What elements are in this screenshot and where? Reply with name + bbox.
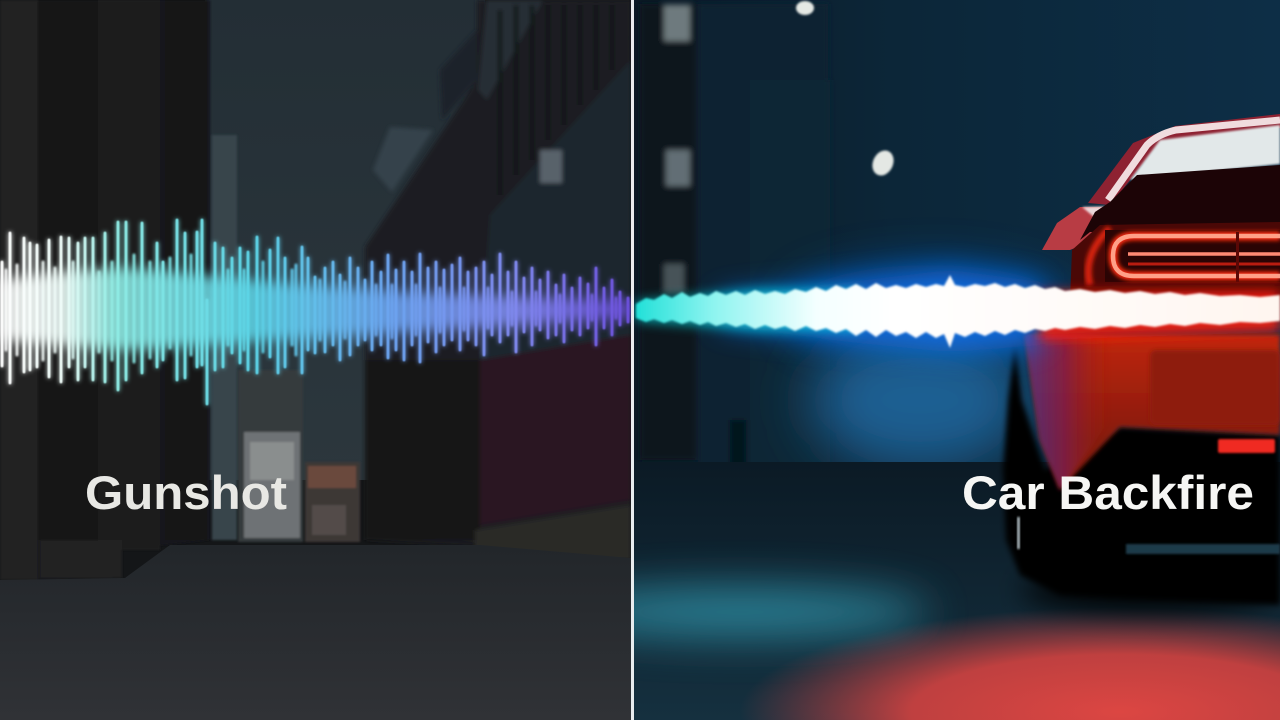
waveform: car backfire <box>636 270 1280 352</box>
label: Gunshot: Gunshot <box>85 466 287 519</box>
wave core <box>636 275 1280 348</box>
wave cyan glow <box>636 290 860 330</box>
waveform short spikes <box>6 255 616 362</box>
waveform spikes <box>2 220 628 404</box>
dark deck <box>1080 165 1280 240</box>
road <box>634 462 1280 720</box>
tail lamp <box>1113 236 1280 276</box>
left buildings <box>0 0 237 580</box>
wave blue glow <box>720 270 1040 352</box>
car tyre and bumper <box>1003 345 1280 605</box>
waveform: gunshot <box>0 220 630 404</box>
car rear body <box>1025 335 1280 490</box>
label: Car Backfire: Car Backfire <box>962 466 1254 519</box>
blue haze <box>790 265 1070 355</box>
wheel highlight <box>1017 517 1020 549</box>
waveform core <box>0 268 630 350</box>
reflector <box>1218 439 1275 453</box>
wave red glow <box>1040 290 1280 340</box>
floor glow <box>550 588 1280 720</box>
car <box>1003 114 1280 610</box>
center divider <box>631 0 634 720</box>
car shadow <box>1022 570 1278 610</box>
street lights <box>796 1 898 179</box>
right buildings <box>365 0 631 560</box>
panel: car backfire street <box>634 0 1280 720</box>
blurred buildings <box>642 0 746 462</box>
tail panel <box>1070 222 1280 300</box>
bumper strip <box>1126 544 1280 554</box>
distant buildings <box>238 370 360 542</box>
C pillar <box>1088 114 1280 205</box>
roof line <box>1108 120 1280 200</box>
ground <box>0 545 631 720</box>
rear window <box>1130 125 1280 180</box>
tail lamp glow <box>1113 236 1280 276</box>
panel: gunshot alley <box>0 0 631 720</box>
sky <box>205 0 485 480</box>
fender <box>1042 207 1102 250</box>
